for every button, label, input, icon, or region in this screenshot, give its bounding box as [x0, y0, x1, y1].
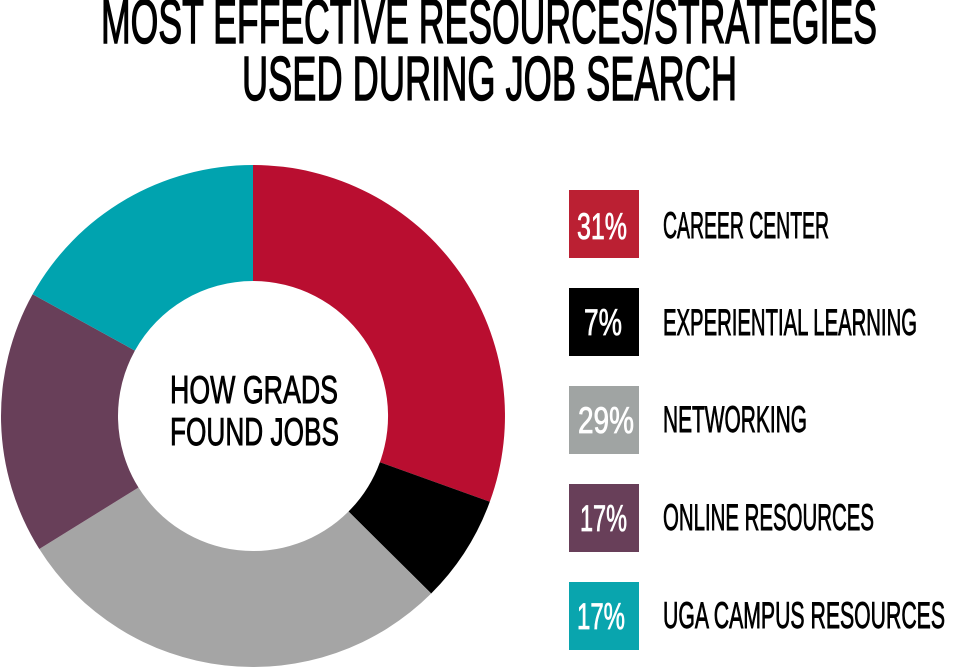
legend item: career center — [569, 190, 829, 258]
legend item: networking: NETWORKING — [663, 399, 807, 440]
legend item: career center: 31% — [577, 206, 627, 247]
segment: experiential learning 7% — [348, 462, 490, 594]
segment: networking 29% — [39, 488, 431, 667]
segment: UGA campus resources 17% — [33, 165, 253, 351]
legend item: experiential learning: 7% — [584, 302, 622, 343]
legend item: online resources — [569, 484, 874, 552]
donut center label: HOW GRADS — [170, 369, 338, 412]
legend — [569, 190, 945, 650]
donut center label — [170, 369, 339, 454]
segment: career center 31% — [253, 165, 505, 502]
legend item: career center: CAREER CENTER — [663, 205, 829, 246]
segment: online resources 17% — [1, 294, 138, 549]
legend item: networking: 29% — [578, 400, 634, 441]
title — [101, 0, 877, 114]
donut chart — [1, 165, 505, 667]
legend item: UGA campus resources — [569, 582, 945, 650]
legend item: networking — [569, 386, 807, 454]
legend item: online resources: 17% — [580, 498, 627, 539]
legend item: UGA campus resources: 17% — [577, 596, 625, 637]
legend item: experiential learning — [569, 288, 917, 356]
donut center label: FOUND JOBS — [170, 411, 339, 454]
